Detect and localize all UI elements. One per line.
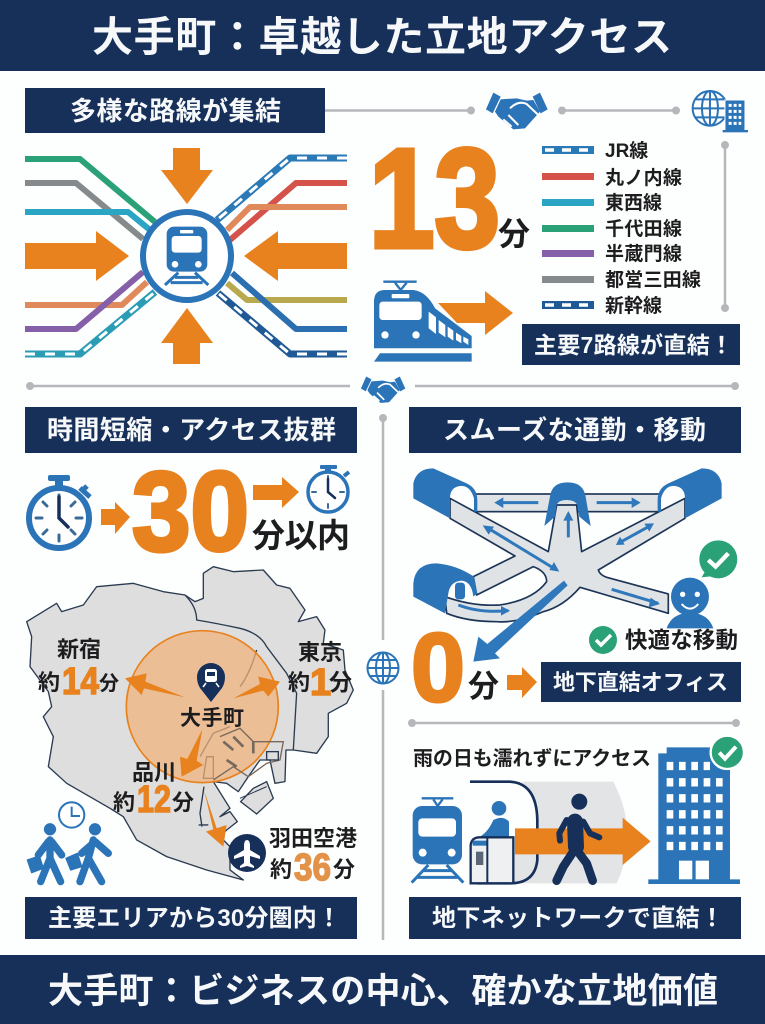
check bubble bbox=[699, 540, 737, 578]
icon: ticket gate bbox=[471, 801, 513, 883]
icon: handshake top bbox=[486, 93, 548, 129]
label: Haneda: 約 bbox=[270, 857, 292, 882]
label: Haneda bbox=[269, 826, 357, 889]
arrow: train to lines bbox=[438, 291, 513, 335]
callout: underground network: 地下ネットワークで直結！ bbox=[432, 905, 724, 932]
legend: seven lines: 千代田線 bbox=[605, 218, 682, 240]
heading: lines bbox=[25, 88, 325, 133]
label: comfortable movement: 快適な移動 bbox=[625, 628, 738, 653]
diagram: underground walkways bbox=[413, 468, 737, 662]
label: comfortable movement bbox=[589, 626, 738, 654]
title bbox=[0, 0, 765, 71]
callout: thirty minute zone: 主要エリアから30分圏内！ bbox=[48, 905, 341, 932]
legend: seven lines: 丸ノ内線 bbox=[605, 167, 682, 189]
label: Tokyo: 1 bbox=[310, 662, 331, 704]
label: Haneda: 分 bbox=[333, 857, 355, 882]
callout: underground network bbox=[409, 897, 741, 939]
label: Shinagawa: 12 bbox=[137, 779, 171, 821]
icon: office tower bbox=[648, 747, 740, 884]
label: Shinagawa: 分 bbox=[172, 790, 194, 815]
legend: seven lines: 半蔵門線 bbox=[605, 243, 682, 265]
number: 13 minutes: 13 bbox=[369, 119, 500, 277]
diagram: station to office bbox=[412, 736, 744, 884]
icon: front train bbox=[412, 798, 463, 883]
text: within minutes: 分以内 bbox=[252, 517, 350, 554]
label: Tokyo: 分 bbox=[329, 669, 352, 695]
label: Tokyo: 東京 bbox=[298, 640, 342, 665]
icon: large stopwatch bbox=[29, 475, 90, 548]
label: Otemachi: 大手町 bbox=[180, 707, 244, 730]
icon: location pin bbox=[197, 663, 225, 702]
panel: rainy day access bbox=[409, 736, 744, 939]
arrow: to 30 bbox=[101, 502, 130, 534]
legend: seven lines bbox=[542, 140, 701, 317]
smiling person bbox=[667, 578, 713, 628]
icon: station train bbox=[143, 212, 231, 300]
icon: check badge bbox=[711, 736, 744, 769]
legend: seven lines: 新幹線 bbox=[605, 295, 662, 317]
label: Shinagawa: 品川 bbox=[132, 760, 176, 785]
map: Tokyo bbox=[27, 567, 353, 880]
callout: direct office: 地下直結オフィス bbox=[553, 670, 728, 695]
label: Shinagawa: 約 bbox=[113, 790, 135, 815]
callout: seven lines bbox=[522, 324, 740, 365]
legend: seven lines: 東西線 bbox=[605, 192, 662, 214]
heading: smooth commute: スムーズな通勤・移動 bbox=[443, 415, 706, 445]
label: Shinjuku: 14 bbox=[62, 661, 99, 703]
number: zero minutes: 0 bbox=[411, 613, 465, 722]
label: Haneda: 羽田空港 bbox=[269, 826, 357, 851]
icon: commuters and clock bbox=[27, 802, 108, 882]
number: 13 minutes: 分 bbox=[498, 216, 530, 252]
arrow: to office bbox=[507, 667, 537, 698]
arrow: 30 to stopwatch bbox=[253, 477, 299, 508]
footer banner: 大手町：ビジネスの中心、確かな立地価値 bbox=[48, 972, 718, 1011]
icon: handshake center bbox=[361, 377, 405, 403]
panel: smooth commute bbox=[409, 407, 741, 722]
icon: globe and building bbox=[693, 91, 748, 132]
label: Shinjuku bbox=[38, 637, 119, 703]
icon: side train bbox=[374, 282, 472, 362]
label: Tokyo bbox=[288, 640, 352, 704]
callout: thirty minute zone bbox=[25, 897, 357, 939]
label: Shinjuku: 分 bbox=[99, 672, 119, 695]
map arrows bbox=[125, 673, 280, 847]
label: Shinagawa bbox=[113, 760, 194, 821]
route lines diagram bbox=[25, 158, 347, 354]
icon: walking person bbox=[557, 794, 599, 881]
number: zero minutes: 分 bbox=[468, 669, 499, 704]
heading: lines: 多様な路線が集結 bbox=[70, 96, 281, 126]
label: Shinjuku: 新宿 bbox=[57, 637, 101, 662]
label: Tokyo: 約 bbox=[288, 670, 310, 695]
heading: time saving: 時間短縮・アクセス抜群 bbox=[47, 415, 336, 445]
footer banner bbox=[0, 955, 765, 1024]
panel: lines converge bbox=[25, 88, 740, 365]
legend: seven lines: 都営三田線 bbox=[605, 269, 701, 291]
icon: small stopwatch bbox=[308, 465, 349, 512]
text: rainy day: 雨の日も濡れずにアクセス bbox=[413, 747, 651, 770]
label: Haneda: 36 bbox=[294, 847, 331, 889]
panel: time saving bbox=[25, 407, 357, 939]
legend: seven lines: JR線 bbox=[605, 140, 648, 162]
icon: airplane bbox=[228, 834, 266, 872]
heading: time saving bbox=[25, 407, 357, 453]
heading: smooth commute bbox=[409, 407, 741, 453]
label: Shinjuku: 約 bbox=[38, 670, 60, 695]
number: zero minutes bbox=[411, 613, 499, 722]
number: 30 minutes: 30 bbox=[132, 449, 249, 574]
arrows into station bbox=[25, 148, 347, 364]
icon: globe center bbox=[367, 652, 399, 684]
callout: seven lines: 主要7路線が直結！ bbox=[534, 332, 733, 358]
title: 大手町：卓越した立地アクセス bbox=[92, 14, 672, 60]
callout: direct office bbox=[541, 662, 741, 702]
arrow: orange path bbox=[515, 818, 651, 865]
